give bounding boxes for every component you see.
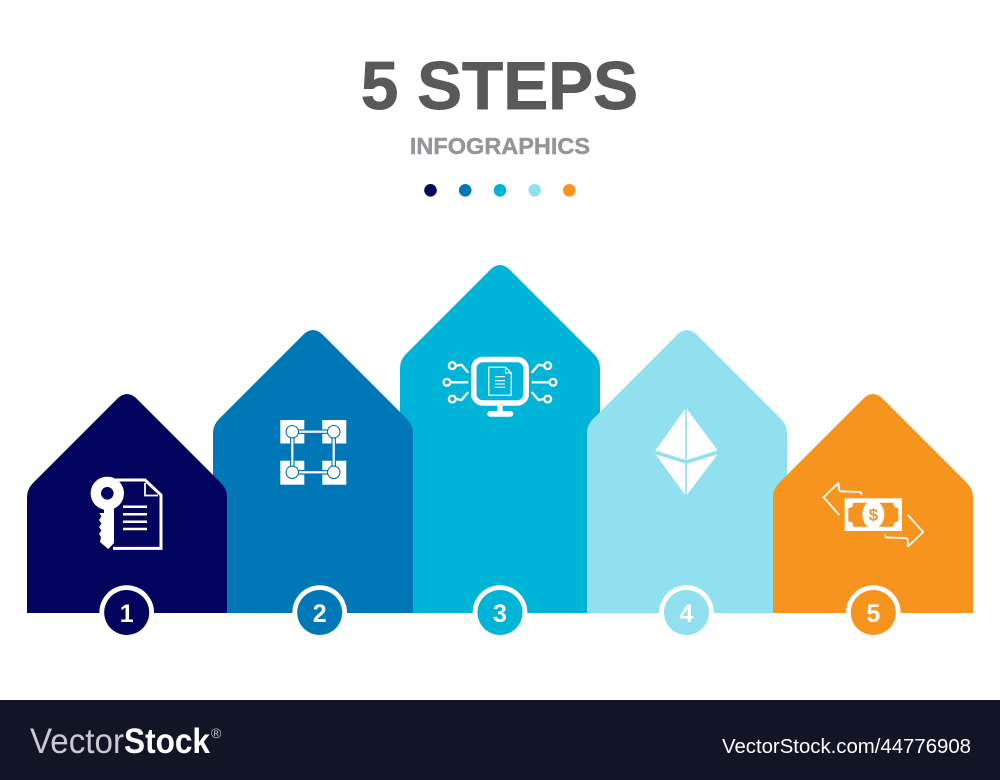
- step 3 number badge: 3: [493, 600, 507, 628]
- step 1 arrow shape: [27, 394, 227, 613]
- icon: diamond crystal: [655, 409, 718, 495]
- title: 5 STEPS: [361, 49, 638, 124]
- footer logo: [30, 722, 222, 761]
- step 5 arrow shape: [773, 394, 973, 613]
- step 4 number badge: 4: [680, 600, 694, 628]
- footer logo: Stock: [124, 722, 210, 761]
- footer bar: [0, 700, 1000, 780]
- panel: step 1: [27, 394, 227, 640]
- step 3 number badge: [473, 585, 527, 640]
- footer logo: Vector: [30, 722, 124, 761]
- step 4 arrow shape: [587, 330, 787, 613]
- colour legend dots: [424, 184, 576, 197]
- step 5 number badge: [846, 585, 901, 640]
- panel: step 4: [587, 330, 787, 640]
- step 4 number badge: [659, 585, 714, 640]
- icon: bounding box nodes: [280, 420, 346, 485]
- panel: step 2: [213, 330, 413, 640]
- step 2 number badge: [292, 585, 347, 640]
- icon: key and document: [91, 477, 161, 549]
- step 1 number badge: 1: [120, 600, 134, 628]
- footer image id: VectorStock.com/44776908: [722, 736, 971, 758]
- footer logo: ®: [211, 725, 222, 741]
- step 1 number badge: [99, 585, 154, 640]
- subtitle: INFOGRAPHICS: [410, 133, 590, 159]
- panel: step 3: [400, 265, 600, 640]
- step 2 arrow shape: [213, 330, 413, 613]
- panel: step 5: [773, 394, 973, 640]
- step 3 arrow shape: [400, 265, 600, 613]
- step 2 number badge: 2: [313, 600, 327, 628]
- icon: monitor with document and circuit lines: [444, 360, 556, 417]
- icon: money transfer: $: [869, 506, 879, 524]
- icon: money transfer: [824, 483, 923, 546]
- step 5 number badge: 5: [866, 600, 880, 628]
